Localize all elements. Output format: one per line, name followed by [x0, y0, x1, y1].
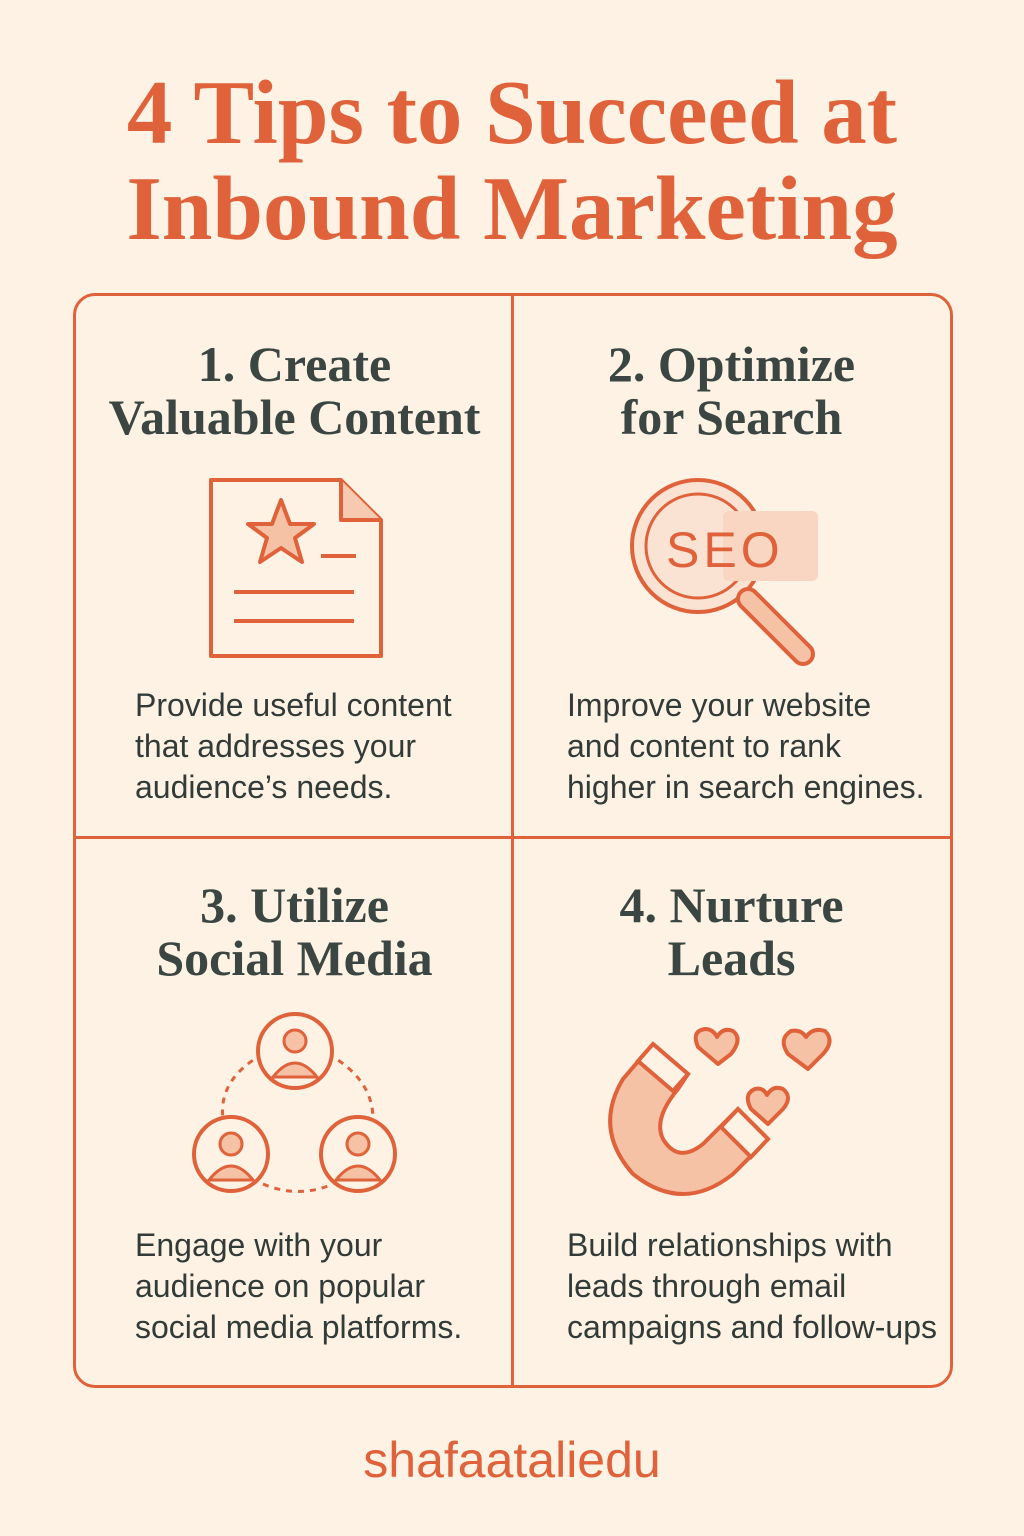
- text 2: higher in search engines.: [567, 769, 925, 805]
- title: Inbound Marketing: [126, 158, 898, 259]
- text 3: Engage with your: [135, 1227, 382, 1263]
- panel 1: create content: [109, 336, 480, 805]
- title: 4 Tips to Succeed at: [127, 62, 897, 163]
- icon: document with star: [209, 478, 383, 658]
- heading 1: [109, 336, 480, 445]
- text 1: audience’s needs.: [135, 769, 392, 805]
- icon: people network: [192, 1012, 397, 1193]
- icon: SEO magnifier: [630, 478, 818, 666]
- heading 4: Leads: [668, 930, 795, 986]
- icon: magnet with hearts: [608, 1027, 832, 1196]
- text 4: [567, 1227, 937, 1345]
- grid frame: [73, 293, 953, 1388]
- heading 3: 3. Utilize: [200, 877, 389, 933]
- title: [126, 62, 898, 259]
- text 4: campaigns and follow-ups: [567, 1309, 937, 1345]
- panel 4: nurture leads: [567, 877, 937, 1345]
- footer: shafaataliedu: [363, 1432, 661, 1488]
- text 4: Build relationships with: [567, 1227, 892, 1263]
- text 4: leads through email: [567, 1268, 846, 1304]
- panel 2: optimize search: [567, 336, 925, 805]
- heading 1: 1. Create: [198, 336, 391, 392]
- heading 2: for Search: [621, 389, 842, 445]
- text 1: Provide useful content: [135, 687, 452, 723]
- text 3: social media platforms.: [135, 1309, 462, 1345]
- text 2: Improve your website: [567, 687, 871, 723]
- heading 4: [619, 877, 844, 986]
- heading 3: Social Media: [156, 930, 433, 986]
- icon: SEO magnifier: SEO: [666, 522, 784, 578]
- heading 4: 4. Nurture: [619, 877, 844, 933]
- text 3: [135, 1227, 462, 1345]
- heading 1: Valuable Content: [109, 389, 480, 445]
- heading 3: [156, 877, 433, 986]
- heading 2: [608, 336, 855, 445]
- heading 2: 2. Optimize: [608, 336, 855, 392]
- panel 3: social media: [135, 877, 462, 1345]
- text 1: that addresses your: [135, 728, 416, 764]
- text 1: [135, 687, 452, 805]
- text 2: [567, 687, 925, 805]
- text 3: audience on popular: [135, 1268, 425, 1304]
- text 2: and content to rank: [567, 728, 841, 764]
